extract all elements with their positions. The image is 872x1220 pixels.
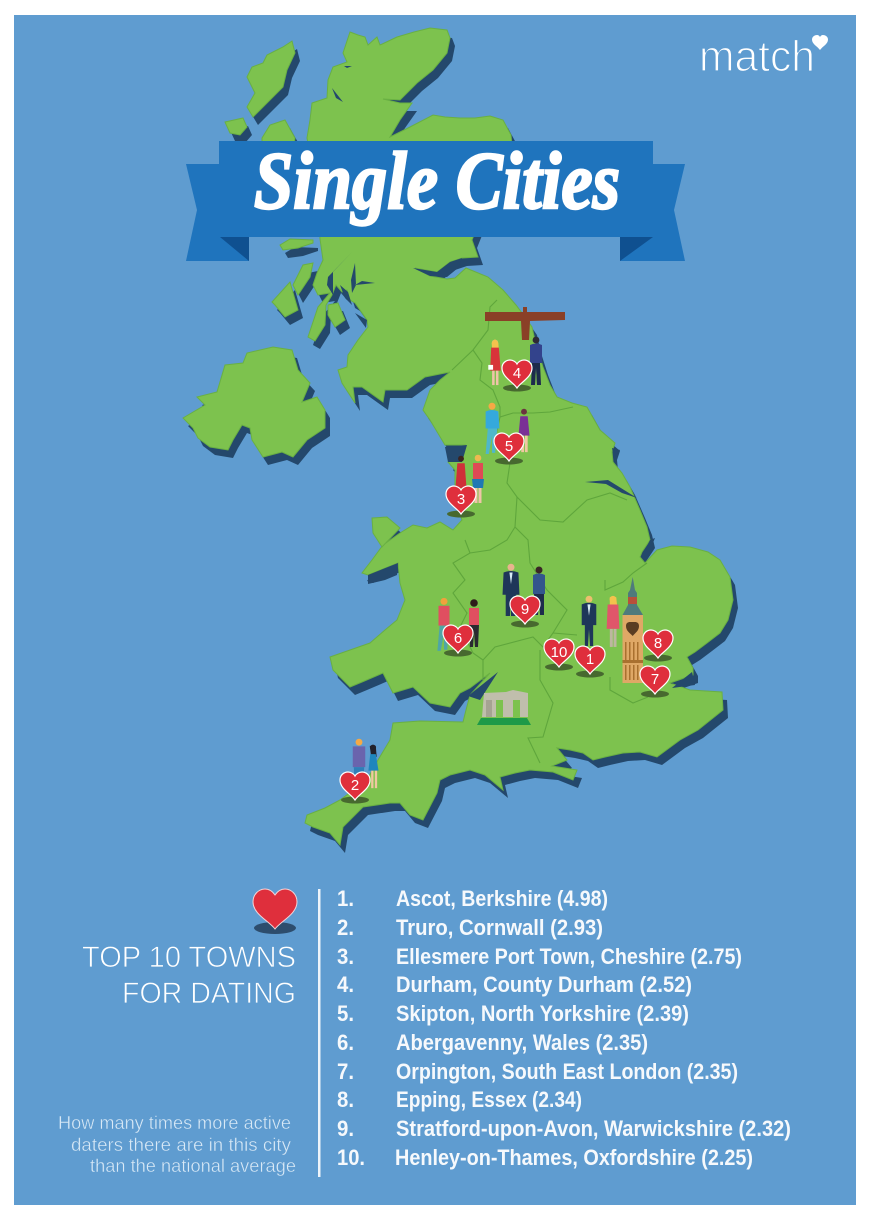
pin 2: [340, 772, 370, 804]
explanatory note: [58, 1113, 296, 1176]
map pins: [340, 360, 673, 804]
pin 6: 6: [454, 630, 462, 647]
couple at Ellesmere Port: [455, 455, 484, 503]
banner folds: [220, 237, 653, 261]
ranked list of towns: 9.: [337, 1116, 354, 1141]
pin 8: 8: [654, 635, 662, 652]
divider line: [318, 889, 320, 1177]
couple at Skipton: [486, 403, 530, 454]
map: UK islands: [183, 28, 738, 853]
ranked list of towns: Truro, Cornwall (2.93): [396, 915, 603, 940]
ranked list of towns: 3.: [337, 944, 354, 969]
pin 5: [494, 433, 524, 464]
pin 4: 4: [513, 365, 521, 382]
explanatory note: than the national average: [90, 1156, 296, 1176]
pin 3: [446, 486, 476, 518]
woman in blue skirt: [472, 455, 484, 503]
ranked list of towns: Henley-on-Thames, Oxfordshire (2.25): [395, 1145, 753, 1170]
map: sea inlets: [327, 66, 695, 700]
ranked list of towns: 8.: [337, 1087, 354, 1112]
pin 3: 3: [457, 491, 465, 508]
ranked list of towns: Stratford-upon-Avon, Warwickshire (2.32): [396, 1116, 791, 1141]
ranked list of towns: Skipton, North Yorkshire (2.39): [396, 1001, 689, 1026]
heading: top 10 towns for dating: TOP 10 TOWNS: [82, 941, 296, 974]
pin 6: [443, 625, 473, 656]
ranked list of towns: Orpington, South East London (2.35): [396, 1059, 738, 1084]
ranked list of towns: 5.: [337, 1001, 354, 1026]
pin 5: 5: [505, 438, 513, 455]
map shadows: [188, 36, 738, 853]
landmark: Big Ben: [622, 577, 643, 683]
title: Single Cities: [254, 135, 620, 226]
ranked list of towns: [337, 886, 791, 1170]
ranked list of towns: Ellesmere Port Town, Cheshire (2.75): [396, 944, 742, 969]
landmark: Angel of the North: [485, 307, 565, 340]
ranked list of towns: 2.: [337, 915, 354, 940]
title banner: [186, 135, 685, 261]
man in blue: [533, 566, 545, 615]
banner left tail: [186, 164, 249, 261]
couple at Stratford: [503, 564, 545, 616]
man in blue: [486, 403, 499, 454]
pin 1: [575, 646, 605, 678]
ranked list of towns: 7.: [337, 1059, 354, 1084]
pin 10: [544, 639, 574, 670]
woman in red: [455, 456, 467, 488]
icon: large heart pin: [253, 889, 297, 934]
couple at Abergavenny: [437, 598, 479, 651]
man in suit: [582, 596, 596, 646]
ranked list of towns: Ascot, Berkshire (4.98): [396, 886, 608, 911]
pin 7: 7: [651, 671, 659, 688]
man in purple: [353, 739, 365, 790]
banner centre: [219, 141, 653, 237]
woman in red dress: [488, 339, 501, 385]
couple at Durham: [488, 337, 542, 385]
couple at Ascot: [582, 596, 619, 647]
pin 4: [502, 360, 532, 392]
ranked list of towns: 10.: [337, 1145, 365, 1170]
pin 8: [643, 630, 673, 662]
ranked list of towns: Epping, Essex (2.34): [396, 1087, 582, 1112]
couple at Truro: [353, 739, 379, 790]
woman in pink top: [469, 599, 479, 647]
ranked list of towns: Abergavenny, Wales (2.35): [396, 1030, 648, 1055]
man in navy: [530, 337, 542, 385]
man in suit: [503, 564, 519, 616]
landmark: Stonehenge: [477, 690, 531, 725]
pin 9: [510, 596, 540, 628]
woman in blue dress: [368, 745, 379, 788]
map: county borders: [452, 300, 648, 763]
banner right tail: [620, 164, 685, 261]
map: Great Britain and Northern Ireland land: [183, 28, 733, 845]
ranked list of towns: Durham, County Durham (2.52): [396, 972, 692, 997]
logo heart: [812, 35, 828, 50]
woman in pink dress: [607, 596, 619, 647]
heading: top 10 towns for dating: FOR DATING: [122, 977, 296, 1010]
explanatory note: daters there are in this city: [71, 1135, 291, 1155]
pin 9: 9: [521, 601, 529, 618]
pin 2: 2: [351, 777, 359, 794]
explanatory note: How many times more active: [58, 1113, 291, 1133]
heading: top 10 towns for dating: [82, 941, 296, 1010]
pin 10: 10: [551, 644, 567, 661]
ranked list of towns: 1.: [337, 886, 354, 911]
logo: match: match: [699, 32, 815, 81]
man in pink vest: [437, 598, 450, 651]
ranked list of towns: 4.: [337, 972, 354, 997]
pin 7: [640, 666, 670, 698]
pin 1: 1: [586, 651, 594, 668]
ranked list of towns: 6.: [337, 1030, 354, 1055]
woman in purple: [518, 409, 530, 452]
